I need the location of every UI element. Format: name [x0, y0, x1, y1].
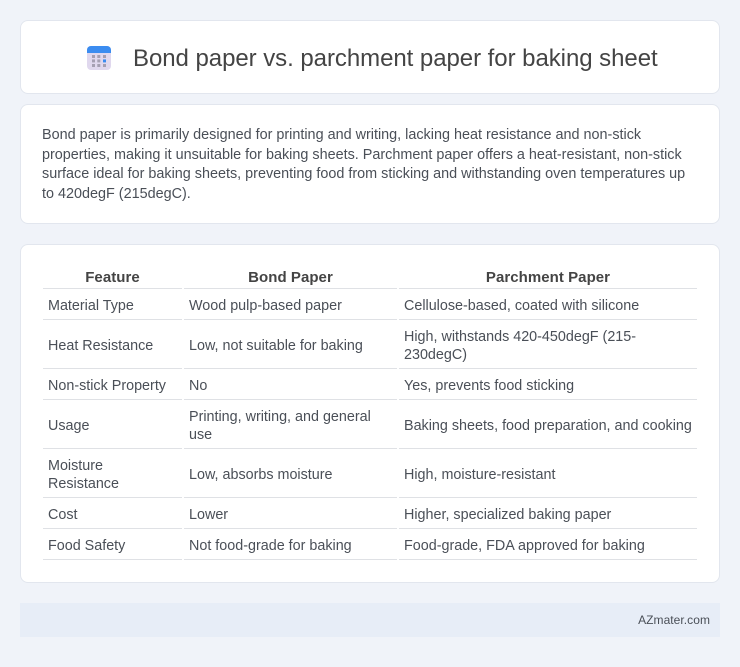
- table header: Feature: [85, 269, 140, 286]
- row: usage: [48, 409, 692, 443]
- row: usage: use: [189, 427, 212, 443]
- row: usage: Usage: [48, 418, 89, 434]
- table header: [85, 269, 610, 286]
- row: material type: Wood pulp-based paper: [189, 298, 342, 314]
- row: moisture resistance: Low, absorbs moisture: [189, 467, 333, 483]
- row: non-stick property: Yes, prevents food sticking: [404, 378, 574, 394]
- description text: Bond paper is primarily designed for printing and writing, lacking heat resistance and non-stick: [42, 127, 641, 143]
- description text: surface ideal for baking sheets, preventing food from sticking and withstanding oven temperatures up: [42, 166, 685, 182]
- row: food safety: Food Safety: [48, 538, 125, 554]
- title: Bond paper vs. parchment paper for baking sheet: [133, 45, 658, 72]
- row lines: [43, 288, 697, 560]
- row: food safety: [48, 538, 645, 554]
- row: food safety: Food-grade, FDA approved for baking: [404, 538, 645, 554]
- row: food safety: Not food-grade for baking: [189, 538, 352, 554]
- description text: properties, making it unsuitable for baking sheets. Parchment paper offers a heat-resistant, non-stick: [42, 147, 682, 163]
- panel: comparison table: [20, 244, 720, 583]
- panel: description: [20, 104, 720, 224]
- row: non-stick property: Non-stick Property: [48, 378, 166, 394]
- row: heat resistance: Low, not suitable for baking: [189, 338, 363, 354]
- row: material type: [48, 298, 639, 314]
- table header: Bond Paper: [248, 269, 333, 286]
- row: heat resistance: 230degC): [404, 347, 467, 363]
- row: cost: Cost: [48, 507, 78, 523]
- row: cost: Lower: [189, 507, 228, 523]
- row: non-stick property: No: [189, 378, 207, 394]
- footer credit: AZmater.com: [638, 613, 710, 627]
- row: heat resistance: High, withstands 420-450degF (215-: [404, 329, 636, 345]
- row: usage: Printing, writing, and general: [189, 409, 371, 425]
- row: usage: Baking sheets, food preparation, and cooking: [404, 418, 692, 434]
- row: moisture resistance: Resistance: [48, 476, 119, 492]
- description text: to 420degF (215degC).: [42, 186, 191, 202]
- row: moisture resistance: [48, 458, 556, 492]
- row: non-stick property: [48, 378, 574, 394]
- footer bar: [20, 603, 720, 637]
- table header: Parchment Paper: [486, 269, 610, 286]
- title card: [20, 20, 720, 94]
- icon: calendar: [87, 46, 111, 70]
- row: moisture resistance: Moisture: [48, 458, 103, 474]
- row: heat resistance: Heat Resistance: [48, 338, 153, 354]
- description text: [42, 127, 685, 202]
- row: material type: Material Type: [48, 298, 134, 314]
- row: moisture resistance: High, moisture-resistant: [404, 467, 555, 483]
- row: heat resistance: [48, 329, 636, 363]
- row: cost: Higher, specialized baking paper: [404, 507, 611, 523]
- row: cost: [48, 507, 612, 523]
- row: material type: Cellulose-based, coated with silicone: [404, 298, 639, 314]
